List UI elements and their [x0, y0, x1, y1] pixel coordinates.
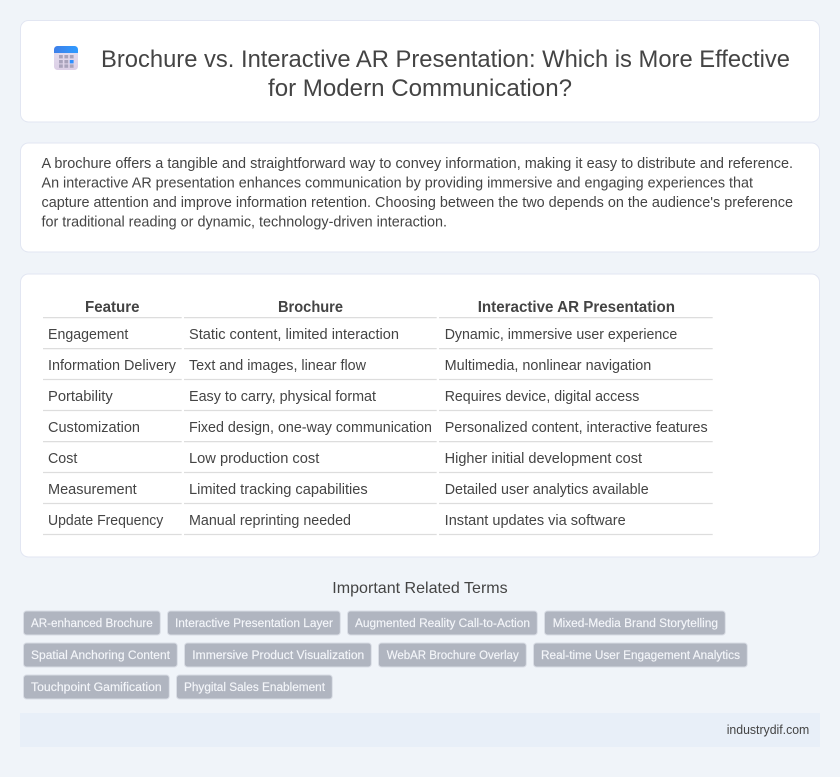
table row: cost: Higher initial development cost — [445, 451, 642, 467]
icon: calendar — [54, 46, 78, 70]
tag: Interactive Presentation Layer — [168, 611, 340, 635]
panel: comparison table — [20, 274, 820, 557]
tag: Interactive Presentation Layer: Interactive Presentation Layer — [175, 616, 333, 630]
tag: Real-time User Engagement Analytics — [534, 643, 747, 667]
tag: Augmented Reality Call-to-Action: Augmented Reality Call-to-Action — [355, 616, 530, 630]
table row: measurement: Measurement — [48, 482, 137, 498]
table header row: Brochure — [278, 299, 343, 316]
tag: Spatial Anchoring Content: Spatial Anchoring Content — [31, 648, 171, 662]
table row: engagement — [43, 327, 713, 349]
table row: customization: Fixed design, one-way communication — [189, 420, 432, 436]
table row: cost — [43, 451, 713, 472]
table row: update frequency: Instant updates via software — [445, 513, 626, 529]
table row: update frequency: Manual reprinting needed — [189, 513, 351, 529]
table row: information delivery — [43, 358, 713, 380]
text block: introduction paragraph — [42, 156, 793, 230]
tag: AR-enhanced Brochure — [24, 611, 160, 635]
heading: important related terms: Important Related Terms — [332, 580, 508, 597]
tag: Immersive Product Visualization: Immersive Product Visualization — [192, 648, 364, 662]
table row: cost: Low production cost — [189, 451, 319, 467]
tag: WebAR Brochure Overlay: WebAR Brochure Overlay — [387, 648, 520, 662]
table row: portability: Portability — [48, 389, 114, 405]
tag: WebAR Brochure Overlay — [378, 643, 526, 667]
table header row: Feature — [85, 299, 140, 316]
tag: Phygital Sales Enablement: Phygital Sales Enablement — [184, 680, 326, 694]
footer — [20, 713, 820, 747]
table row: measurement: Detailed user analytics available — [445, 482, 649, 498]
title — [101, 46, 790, 102]
tag: Augmented Reality Call-to-Action — [348, 611, 537, 635]
tag: Mixed-Media Brand Storytelling: Mixed-Media Brand Storytelling — [553, 616, 718, 630]
text block: introduction paragraph: An interactive AR presentation enhances communication by providing immersive and engaging experiences that — [42, 176, 753, 192]
table row: measurement: Limited tracking capabilities — [189, 482, 368, 498]
table row: information delivery: Multimedia, nonlinear navigation — [445, 358, 651, 374]
text block: introduction paragraph: A brochure offers a tangible and straightforward way to convey information, making it easy to distribute and reference. — [42, 156, 793, 172]
tag: Real-time User Engagement Analytics: Real-time User Engagement Analytics — [541, 648, 740, 662]
tag: Phygital Sales Enablement — [176, 675, 332, 699]
table row: engagement: Static content, limited interaction — [189, 327, 399, 343]
table row: customization: Customization — [48, 420, 140, 436]
tag: Touchpoint Gamification: Touchpoint Gamification — [31, 680, 162, 694]
tag: Immersive Product Visualization — [184, 643, 371, 667]
tag: Mixed-Media Brand Storytelling — [544, 611, 725, 635]
tag: Touchpoint Gamification — [24, 675, 169, 699]
table row: update frequency — [43, 513, 713, 534]
table row: portability: Easy to carry, physical format — [189, 389, 376, 405]
table row: update frequency: Update Frequency — [48, 513, 164, 529]
table row: information delivery: Information Delivery — [48, 358, 177, 374]
panel: related term tags — [24, 611, 747, 699]
tag: AR-enhanced Brochure: AR-enhanced Brochure — [31, 616, 153, 630]
title: for Modern Communication? — [268, 75, 572, 102]
panel: title card — [20, 20, 820, 122]
text block: introduction paragraph: capture attention and improve information retention. Choosing between the two depends on the audience's preference — [42, 195, 793, 211]
table row: measurement — [43, 482, 713, 504]
panel: introduction — [20, 143, 820, 252]
table row: engagement: Dynamic, immersive user experience — [445, 327, 677, 343]
tag: Spatial Anchoring Content — [24, 643, 177, 667]
table row: customization — [43, 420, 713, 442]
table header row — [43, 299, 713, 318]
table row: portability — [43, 389, 713, 410]
table row: portability: Requires device, digital access — [445, 389, 639, 405]
table row: cost: Cost — [48, 451, 77, 467]
title: Brochure vs. Interactive AR Presentation: Which is More Effective — [101, 46, 790, 73]
table header row: Interactive AR Presentation — [478, 299, 675, 316]
footer: industrydif.com — [727, 722, 809, 737]
table row: information delivery: Text and images, linear flow — [189, 358, 367, 374]
text block: introduction paragraph: for traditional reading or dynamic, technology-driven interaction. — [42, 214, 447, 230]
table row: customization: Personalized content, interactive features — [445, 420, 708, 436]
table row: engagement: Engagement — [48, 327, 128, 343]
